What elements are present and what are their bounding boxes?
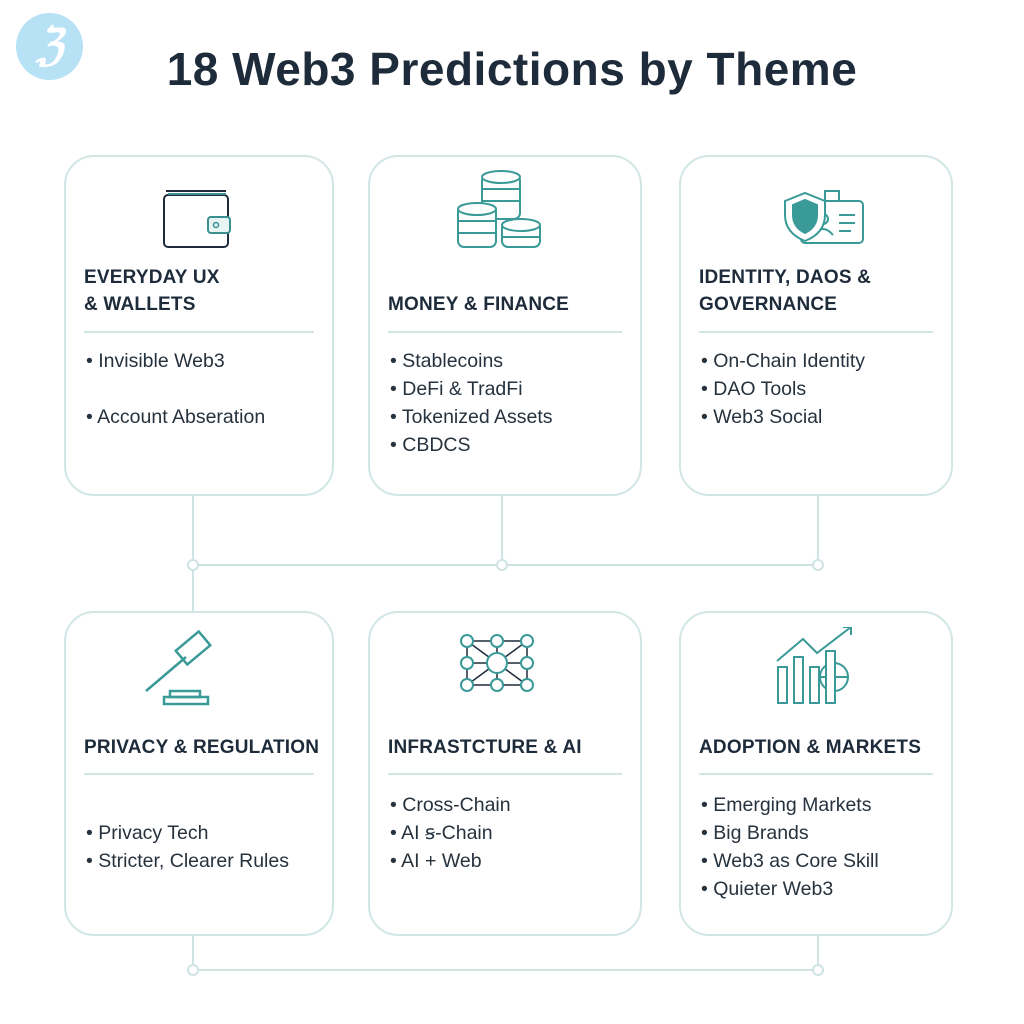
bullets: • Emerging Markets [701,794,871,816]
icon: shield id [784,190,864,244]
heading: MONEY & FINANCE [388,294,569,315]
bullets: • Web3 Social [701,406,822,428]
heading [699,267,871,315]
icon: wallet [163,190,231,248]
bullets [86,350,265,428]
bullets: • Web3 as Core Skill [701,850,879,872]
bullets: • On-Chain Identity [701,350,865,372]
bullets: • DeFi & TradFi [390,378,523,400]
panel: identity [679,155,953,496]
bullets: • Tokenized Assets [390,406,553,428]
bullets: • Cross-Chain [390,794,511,816]
bullets: • Account Abseration [86,406,265,428]
panel: money [368,155,642,496]
heading: ADOPTION & MARKETS [699,737,921,758]
bullets [701,794,879,900]
bullets: • CBDCS [390,434,471,456]
logo [16,13,83,80]
bullets [390,350,553,456]
icon: chart [776,627,852,704]
bullets [86,822,289,872]
panel: privacy [64,611,334,936]
bullets: • AI + Web [390,850,482,872]
panel: adoption [679,611,953,936]
panel: infrastructure [368,611,642,936]
bullets: • Quieter Web3 [701,878,833,900]
logo: ℨ [36,21,63,70]
icon: coins [457,170,541,248]
heading: PRIVACY & REGULATION [84,737,319,758]
bullets: • Stablecoins [390,350,503,372]
heading [84,267,220,315]
bullets: • Privacy Tech [86,822,208,844]
heading: EVERYDAY UX [84,267,220,288]
bullets: • AI ꞩ-Chain [390,822,493,844]
title: 18 Web3 Predictions by Theme [167,43,857,95]
icon: network [460,634,534,692]
bullets: • Stricter, Clearer Rules [86,850,289,872]
bullets [390,794,511,872]
bullets: • Invisible Web3 [86,350,225,372]
heading: INFRASTCTURE & AI [388,737,582,758]
bullets: • DAO Tools [701,378,806,400]
heading: & WALLETS [84,294,196,315]
bullets [701,350,865,428]
panel: everyday ux [64,155,334,496]
heading: IDENTITY, DAOS & [699,267,871,288]
icon: gavel [145,630,212,706]
heading: GOVERNANCE [699,294,837,315]
bullets: • Big Brands [701,822,809,844]
